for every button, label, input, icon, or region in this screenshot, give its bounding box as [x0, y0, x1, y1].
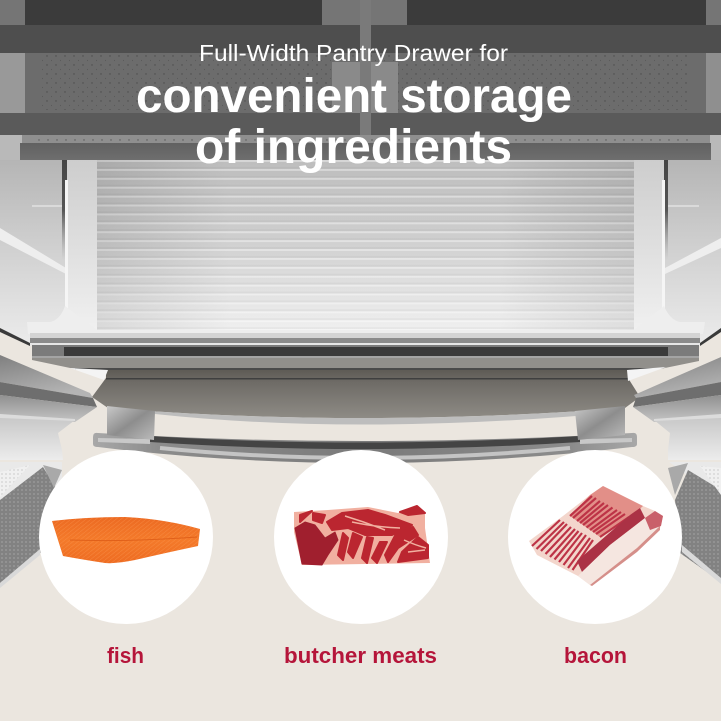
ribbed rear panel	[65, 160, 665, 335]
butcher meats circle	[274, 450, 448, 624]
handle brackets	[107, 406, 625, 440]
fish circle	[39, 450, 213, 624]
label: fish: fish	[107, 643, 144, 668]
fridge interior top shelf	[0, 0, 721, 165]
drawer handle	[93, 433, 637, 463]
headline: convenient storage	[136, 70, 572, 123]
left side wall	[0, 160, 67, 346]
right door shelf	[633, 357, 721, 460]
bacon circle	[508, 450, 682, 624]
icon: salmon fillet	[52, 517, 200, 563]
headline	[136, 70, 572, 174]
right door basket	[668, 462, 721, 584]
icon: butcher meat	[294, 506, 430, 565]
label: bacon: bacon	[564, 643, 627, 668]
left door shelf	[0, 355, 97, 460]
label: butcher meats: butcher meats	[284, 643, 437, 668]
subtitle: Full-Width Pantry Drawer for	[199, 40, 508, 66]
drawer rail	[32, 345, 699, 370]
drawer tray lip	[27, 306, 705, 345]
right side wall	[663, 160, 721, 346]
icon: bacon slab	[529, 486, 663, 586]
left door basket	[0, 462, 62, 588]
drawer front panel	[70, 367, 666, 425]
headline: of ingredients	[195, 121, 512, 174]
